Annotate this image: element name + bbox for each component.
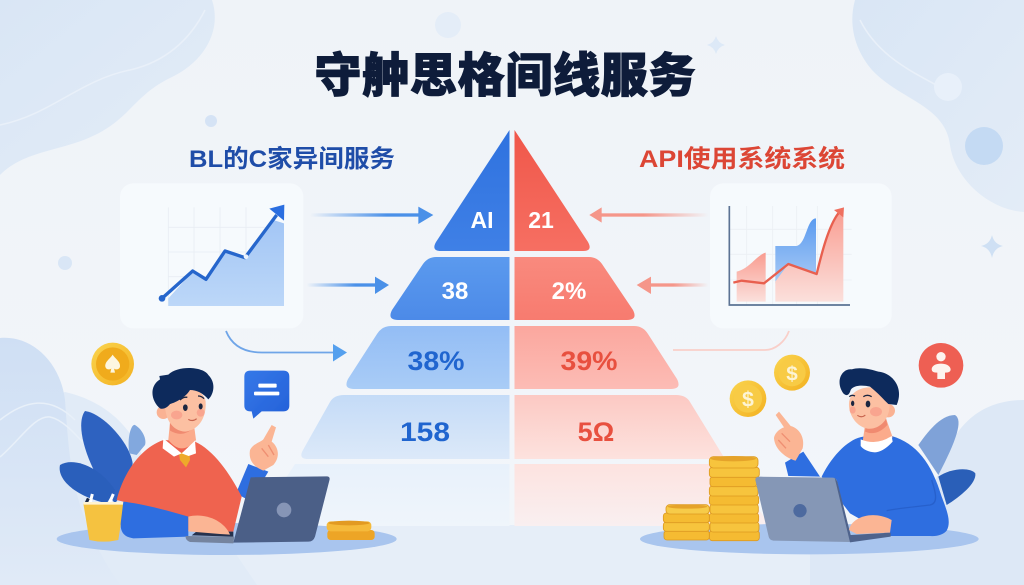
arrow: middle right bbox=[637, 277, 708, 294]
chat bubble icon bbox=[244, 371, 289, 419]
left heading: BL的C家异间服务 bbox=[189, 145, 395, 173]
spade coin icon bbox=[91, 343, 134, 385]
dollar coins: $ bbox=[786, 362, 798, 385]
tier 4: 5Ω bbox=[578, 417, 614, 447]
arrow: middle left bbox=[307, 277, 389, 294]
pen cup bbox=[83, 494, 124, 542]
tier 5 bbox=[255, 464, 770, 526]
raised arm bbox=[785, 452, 820, 477]
dollar coins: $ bbox=[742, 388, 754, 412]
dollar coins bbox=[730, 355, 810, 417]
pyramid bbox=[255, 130, 770, 526]
pointing hand bbox=[774, 412, 803, 461]
desk shadow bbox=[57, 523, 397, 555]
collar and tie bbox=[163, 438, 196, 467]
decorative dots and sparkles bbox=[58, 12, 1003, 270]
desk shadow bbox=[640, 524, 979, 554]
tier 4: 158 bbox=[400, 417, 450, 447]
lower sleeve bbox=[121, 502, 188, 538]
coin stack bbox=[327, 521, 375, 540]
tier 1 bbox=[434, 130, 590, 251]
coin stacks bbox=[663, 456, 759, 541]
tier 1: AI bbox=[470, 207, 494, 233]
laptop bbox=[186, 476, 330, 543]
right heading: API使用系统系统 bbox=[639, 145, 845, 173]
illustration: left person at laptop bbox=[57, 343, 397, 555]
pointing hand bbox=[250, 425, 278, 471]
laptop bbox=[755, 477, 891, 542]
arrow: upper right bbox=[589, 207, 708, 223]
raised arm bbox=[236, 464, 268, 500]
neck bbox=[168, 420, 196, 448]
illustration: right person at laptop bbox=[640, 343, 979, 554]
plant leaves bbox=[918, 415, 975, 505]
tier 2: 38 bbox=[442, 278, 468, 305]
plant leaves bbox=[60, 411, 145, 503]
arrow: lower left bbox=[226, 331, 347, 362]
tier 2: 2% bbox=[552, 278, 586, 305]
person badge icon bbox=[919, 343, 963, 388]
title: 守舯思格间线服务 bbox=[314, 49, 696, 102]
typing hand bbox=[849, 515, 892, 534]
arrow: lower right bbox=[673, 331, 789, 350]
typing hand bbox=[188, 516, 230, 535]
arrow: upper left bbox=[310, 207, 433, 224]
torso bbox=[822, 436, 949, 536]
panel: blue line chart bbox=[120, 183, 303, 328]
head bbox=[152, 368, 213, 432]
tier 3 bbox=[346, 326, 679, 389]
sleeve crease bbox=[887, 480, 936, 511]
head bbox=[840, 368, 899, 429]
tier 2 bbox=[390, 257, 635, 320]
tier 3: 38% bbox=[408, 346, 464, 376]
tier 3: 39% bbox=[560, 346, 618, 376]
tier 4 bbox=[301, 395, 725, 459]
torso bbox=[117, 440, 242, 532]
collar bbox=[861, 436, 893, 452]
neck bbox=[863, 418, 893, 445]
tier 1: 21 bbox=[528, 207, 554, 233]
panel: red and blue area chart bbox=[710, 183, 892, 328]
